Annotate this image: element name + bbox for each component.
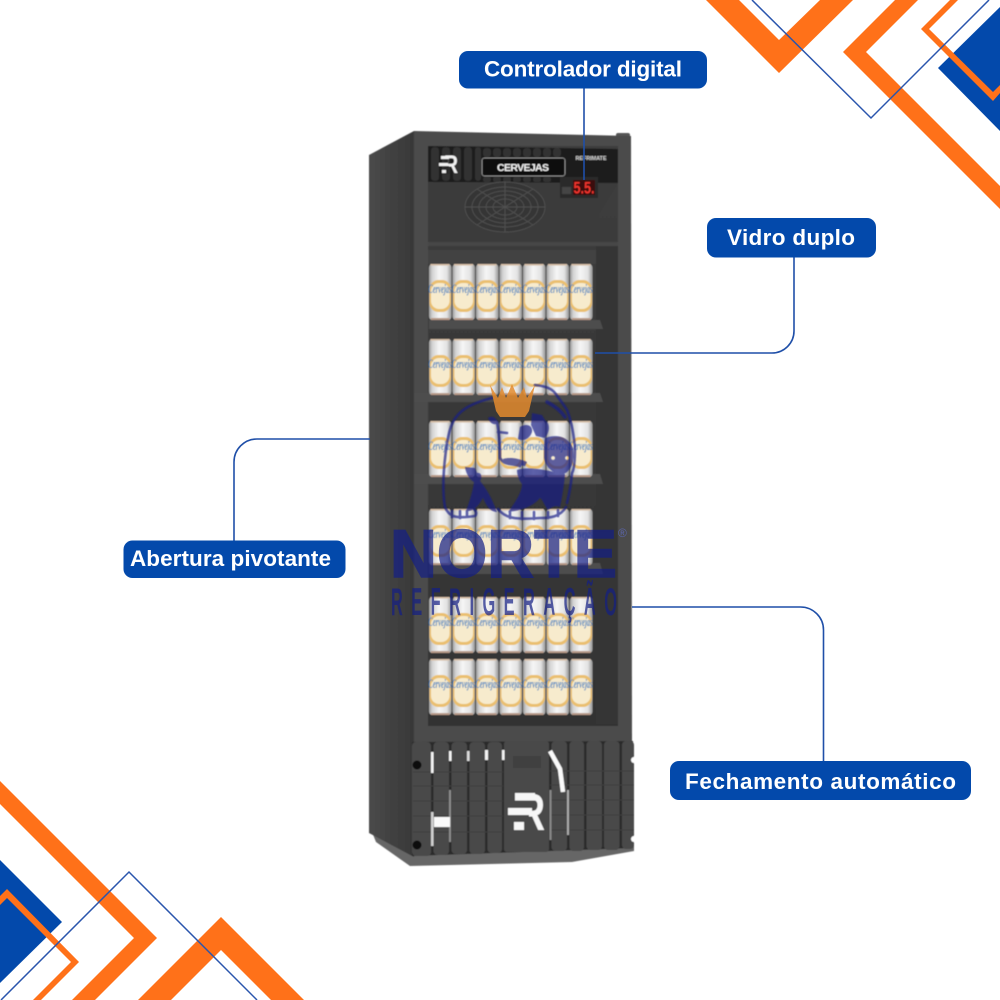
cans: row 5: Cervejas [428,615,452,629]
cans: row 2 [428,339,593,395]
plinth [372,832,634,866]
cans: row 4 [428,509,593,565]
watermark: NORTE: NORTE [390,516,617,592]
cans: row 2: Cervejas [522,357,546,371]
connector: vidro duplo [595,257,794,353]
cans: row 4: Cervejas [522,527,546,541]
cans: row 3: Cervejas [428,439,452,453]
cans: row 1: Cervejas [476,282,499,296]
cans: row 6: Cervejas [522,677,546,691]
label: abertura pivotante: Abertura pivotante [130,546,331,571]
label: controlador digital [459,51,707,88]
label: fechamento automatico: Fechamento automático [685,769,956,794]
cans: row 1: Cervejas [499,282,522,296]
connector: controlador digital [583,88,585,180]
cans: row 1: Cervejas [570,282,593,296]
cans: row 4: Cervejas [428,527,452,541]
bear outline [443,385,575,519]
cans: row 3: Cervejas [476,439,499,453]
refrigerator [369,131,637,866]
cans: row 6: Cervejas [428,677,452,691]
cans: row 5: Cervejas [499,615,522,629]
cans: row 4: Cervejas [499,527,522,541]
cans: row 5: Cervejas [522,615,546,629]
cans: row 4: Cervejas [452,527,475,541]
bear dark markings [465,413,574,512]
cans: row 3: Cervejas [499,439,522,453]
cans: row 1 [428,264,593,320]
cans: row 6: Cervejas [546,677,569,691]
shelf 4 [429,563,603,574]
cans: row 6: Cervejas [476,677,499,691]
bottom grille [412,741,637,856]
watermark: REFRIGERACAO: REFRIGERAÇÃO [391,580,617,624]
label: vidro duplo: Vidro duplo [727,225,855,250]
cans: row 6: Cervejas [499,677,522,691]
watermark: bear [443,385,575,519]
cans: row 2: Cervejas [546,357,569,371]
label: vidro duplo [707,218,876,258]
interior top [428,242,618,246]
decoration: top right corner [706,0,1000,209]
header logo: R [444,151,458,179]
cans: row 3: Cervejas [522,439,546,453]
cans: row 6: Cervejas [570,677,593,691]
sign: Cervejas [482,158,565,176]
cans: row 2: Cervejas [499,357,522,371]
cans: row 5: Cervejas [546,615,569,629]
cans: row 1: Cervejas [546,282,569,296]
cans: row 5: Cervejas [452,615,475,629]
cans: row 5: Cervejas [476,615,499,629]
cans: row 5: Cervejas [570,615,593,629]
header band [428,146,618,183]
cans: row 2: Cervejas [428,357,452,371]
cans: row 2: Cervejas [452,357,475,371]
bottom logo: R [518,784,545,842]
cans: row 2: Cervejas [476,357,499,371]
cans: row 3: Cervejas [452,439,475,453]
side panel [369,131,414,857]
fan housing [428,183,618,242]
connector: fechamento automatico [632,607,824,762]
glass interior [428,146,618,726]
cans: row 4: Cervejas [546,527,569,541]
decoration: bottom left corner [0,781,304,1000]
cans: row 4: Cervejas [570,527,593,541]
digital display [560,177,598,198]
label: fechamento automatico [670,761,971,800]
cans: row 3 [428,421,593,477]
label: controlador digital: Controlador digital [484,56,682,82]
cans: row 1: Cervejas [452,282,475,296]
shelf 2 [414,393,603,402]
cans: row 6 [428,659,593,715]
shelf 1 [429,320,603,329]
shelf 3 [414,474,603,484]
cans: row 5 [428,597,593,653]
watermark: registered mark: ® [618,526,627,540]
cans: row 1: Cervejas [522,282,546,296]
digital display: 5.5. [574,178,594,198]
watermark: crown [490,384,535,417]
cans: row 2: Cervejas [570,357,593,371]
header logo [439,151,458,179]
sign: Cervejas: CERVEJAS [497,162,549,174]
brand text: REFRIMATE [576,156,607,162]
cans: row 4: Cervejas [476,527,499,541]
cans: row 1: Cervejas [428,282,452,296]
cans: row 3: Cervejas [570,439,593,453]
door frame [414,131,632,742]
label: abertura pivotante [124,540,346,578]
cans: row 6: Cervejas [452,677,475,691]
fan [465,182,545,232]
bottom logo [508,784,545,842]
cans: row 3: Cervejas [546,439,569,453]
top handle [616,133,630,139]
connector: abertura pivotante [234,439,370,541]
right interior wall [596,246,618,724]
